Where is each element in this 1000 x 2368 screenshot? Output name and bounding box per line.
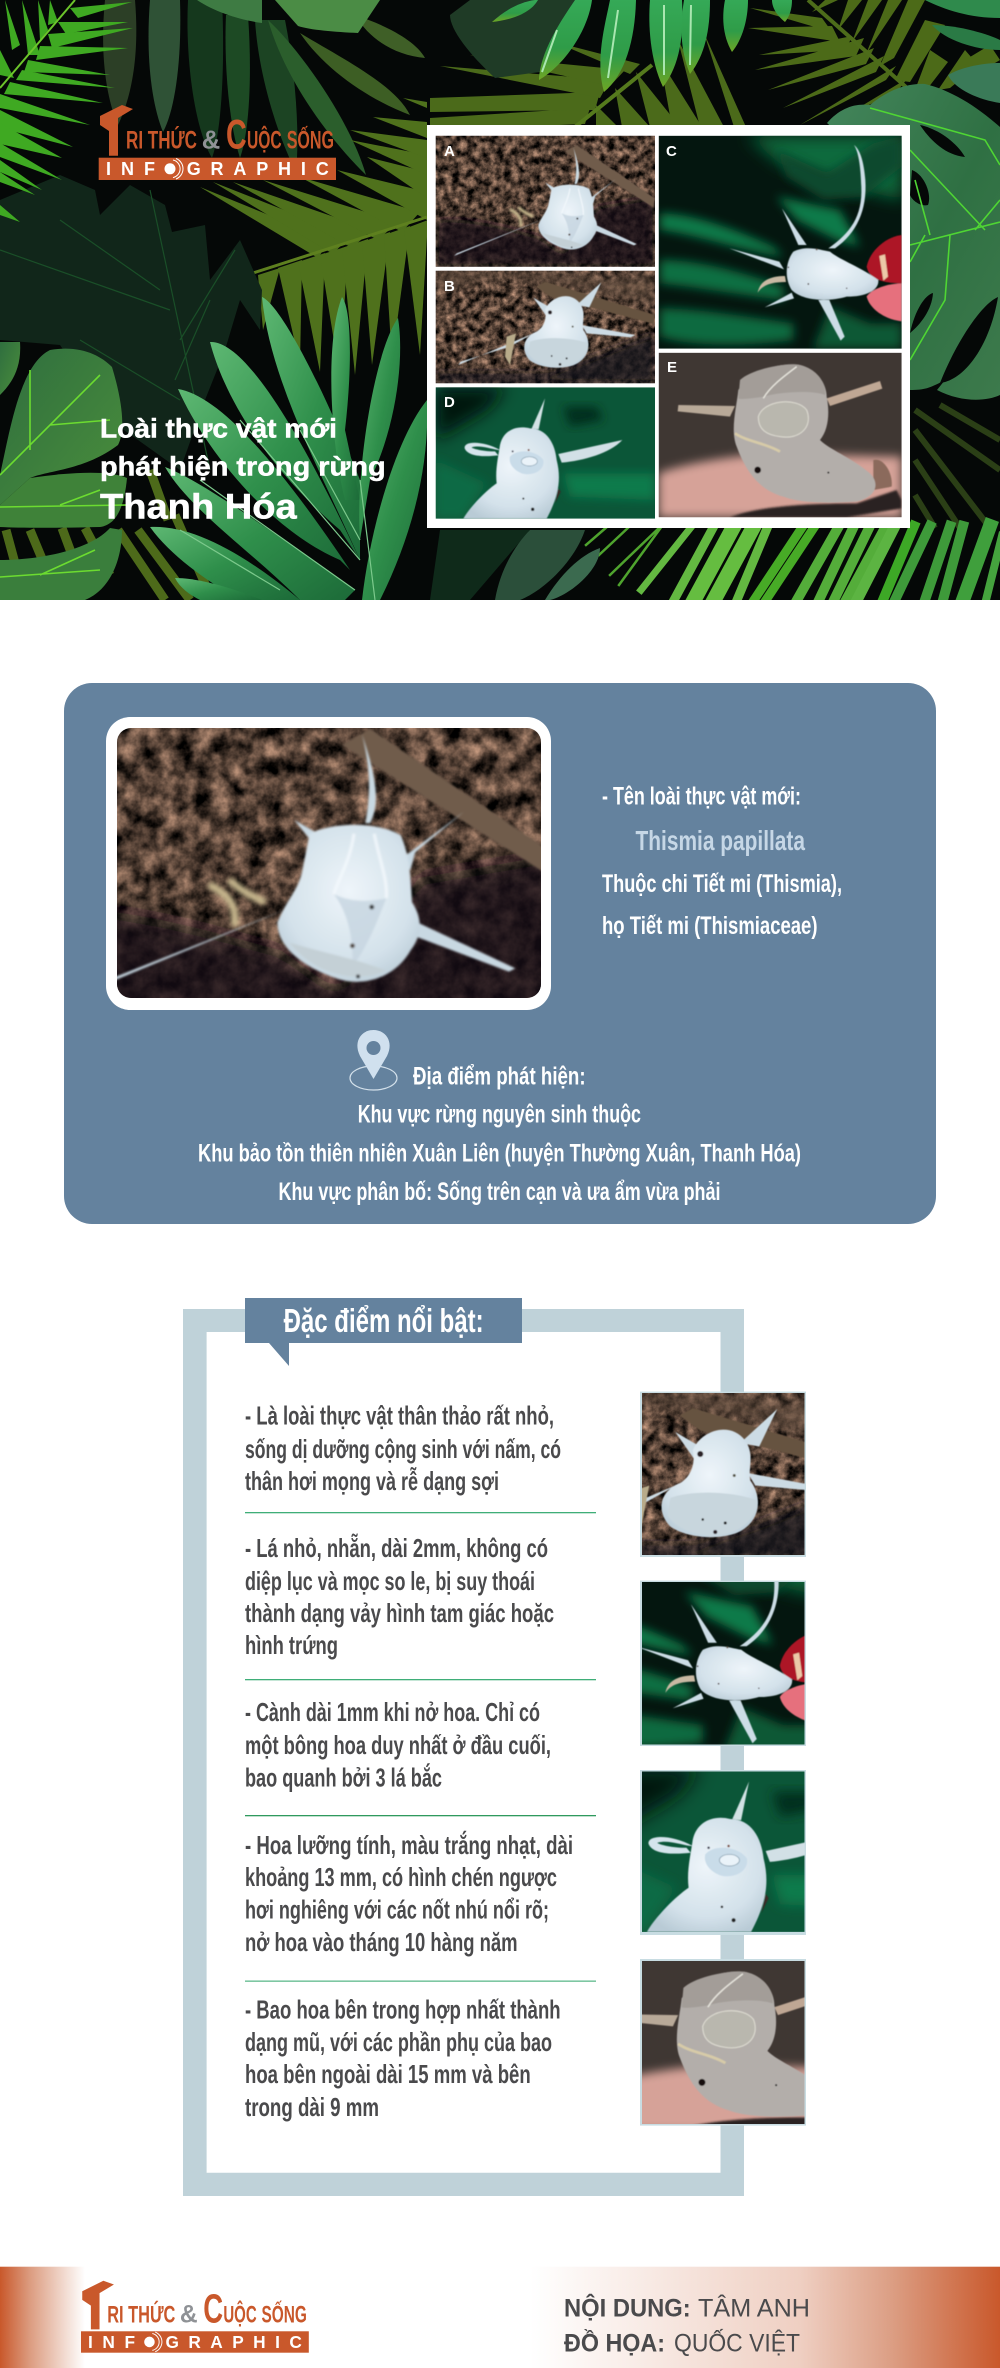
feature 3: - Cành dài 1mm khi nở hoa. Chỉ có (245, 1697, 540, 1727)
species name text (602, 782, 842, 940)
logo: Tri Thuc & Cuoc Song Infographic: UỘC (247, 124, 282, 154)
photo collage A to E (427, 125, 910, 528)
photo C (659, 136, 902, 349)
thumbnail 2 (640, 1580, 806, 1746)
feature 2: hình trứng (245, 1630, 338, 1660)
olive fronds lower left (6, 470, 212, 600)
species name text: - Tên loài thực vật mới: (602, 782, 801, 810)
footer logo: INF (88, 2332, 135, 2352)
logo: Tri Thuc & Cuoc Song Infographic: RI THỨC (126, 124, 197, 154)
discovery location text: Địa điểm phát hiện: (413, 1062, 586, 1090)
feature 5: trong dài 9 mm (245, 2092, 379, 2122)
photo D (436, 387, 655, 519)
frame (183, 1309, 744, 2196)
feature 5: dạng mũ, với các phần phụ của bao (245, 2027, 552, 2057)
logo: Tri Thuc & Cuoc Song Infographic: C (226, 110, 247, 157)
thumbnail 3 (640, 1770, 806, 1935)
dark green leaf top centre (450, 0, 575, 78)
feature 1: thân hơi mọng và rễ dạng sợi (245, 1466, 499, 1496)
footer logo (81, 2281, 309, 2353)
feature 1: sống dị dưỡng cộng sinh với nấm, có (245, 1434, 561, 1464)
thumbnail 1 (640, 1392, 806, 1557)
photo D: D (444, 394, 455, 411)
discovery location text: Khu bảo tồn thiên nhiên Xuân Liên (huyện Thường Xuân, Thanh Hóa) (198, 1140, 801, 1168)
olive palm frond top right (748, 0, 1000, 125)
hero title (100, 414, 386, 526)
olive palm frond centre-left (200, 98, 428, 378)
discovery location text: Khu vực rừng nguyên sinh thuộc (358, 1101, 641, 1129)
green blade leaves centre (150, 297, 427, 600)
credits: QUỐC VIỆT (674, 2328, 800, 2358)
feature 4: - Hoa lưỡng tính, màu trắng nhạt, dài (245, 1830, 573, 1860)
feature 4 (245, 1830, 573, 1957)
species name text: họ Tiết mi (Thismiaceae) (602, 912, 818, 940)
credits: NỘI DUNG: (564, 2293, 691, 2323)
species name text: Thuộc chi Tiết mi (Thismia), (602, 870, 842, 898)
footer band (0, 2267, 1000, 2368)
olive palm frond top centre (430, 38, 745, 125)
credits (564, 2293, 810, 2358)
panel: species information (29, 683, 936, 1224)
feature 3 (245, 1697, 551, 1792)
bright palm leaflets bottom right (586, 526, 1000, 600)
footer logo: C (203, 2285, 223, 2331)
footer logo: UỘC (223, 2300, 257, 2328)
photo C: C (666, 143, 677, 160)
hero title: Thanh Hóa (100, 487, 297, 526)
bright monstera leaf bottom left (0, 342, 127, 600)
footer logo: RI THỨC (107, 2300, 175, 2328)
feature 2: - Lá nhỏ, nhẵn, dài 2mm, không có (245, 1533, 548, 1563)
feature 5: hoa bên ngoài dài 15 mm và bên (245, 2059, 531, 2089)
icon: location pin (350, 1030, 397, 1090)
photo A (436, 136, 655, 267)
thumbnail 4 (640, 1959, 806, 2126)
species name text: Thismia papillata (636, 825, 805, 856)
hero banner with tropical foliage (0, 0, 1000, 600)
hero title: phát hiện trong rừng (100, 452, 386, 482)
logo: Tri Thuc & Cuoc Song Infographic: GRAPHIC (187, 159, 329, 179)
dark monstera leaf left (0, 175, 262, 470)
bright palm frond top left (0, 0, 133, 222)
hero title: Loài thực vật mới (100, 414, 337, 444)
feature 2: thành dạng vảy hình tam giác hoặc (245, 1598, 554, 1628)
footer logo: GRAPHIC (165, 2332, 302, 2352)
right monstera leaf (827, 0, 1000, 400)
heading label (245, 1298, 522, 1366)
feature 4: nở hoa vào tháng 10 hàng năm (245, 1927, 518, 1957)
photo E: E (667, 359, 677, 376)
logo: Tri Thuc & Cuoc Song Infographic: & (202, 124, 220, 154)
green hanging leaves top (492, 0, 792, 92)
logo: Tri Thuc & Cuoc Song Infographic: INF (106, 159, 155, 179)
feature 3: bao quanh bởi 3 lá bắc (245, 1762, 442, 1792)
photo E (659, 353, 902, 517)
logo T mark (100, 105, 133, 156)
credits: ĐỒ HỌA: (564, 2328, 665, 2358)
faint fronds lower right (915, 405, 1000, 528)
logo: Tri Thuc & Cuoc Song Infographic: SỐNG (287, 124, 334, 154)
feature 4: khoảng 13 mm, có hình chén ngược (245, 1862, 557, 1892)
footer logo: SỐNG (261, 2300, 307, 2328)
main flower photo (106, 717, 551, 1010)
feature 2: diệp lục và mọc so le, bị suy thoái (245, 1566, 535, 1596)
feature 3: một bông hoa duy nhất ở đầu cuối, (245, 1730, 551, 1760)
feature 1: - Là loài thực vật thân thảo rất nhỏ, (245, 1401, 554, 1431)
photo A: A (444, 143, 455, 160)
panel: key features (183, 1298, 806, 2196)
feature 2 (245, 1533, 554, 1660)
discovery location text (198, 1062, 801, 1206)
logo: Tri Thuc & Cuoc Song Infographic (99, 105, 336, 180)
credits: TÂM ANH (698, 2294, 810, 2323)
photo B (436, 271, 655, 383)
feature 1 (245, 1401, 561, 1496)
heading label: Đặc điểm nổi bật: (284, 1302, 484, 1339)
discovery location text: Khu vực phân bố: Sống trên cạn và ưa ẩm vừa phải (278, 1178, 720, 1206)
dark blades bottom centre (430, 530, 600, 600)
feature 4: hơi nghiêng với các nốt nhú nổi rõ; (245, 1894, 549, 1924)
dark upper-left hanging leaves (103, 0, 425, 175)
feature 5 (245, 1994, 561, 2122)
feature 5: - Bao hoa bên trong hợp nhất thành (245, 1994, 561, 2024)
footer logo: & (180, 2300, 198, 2328)
photo B: B (444, 278, 455, 295)
